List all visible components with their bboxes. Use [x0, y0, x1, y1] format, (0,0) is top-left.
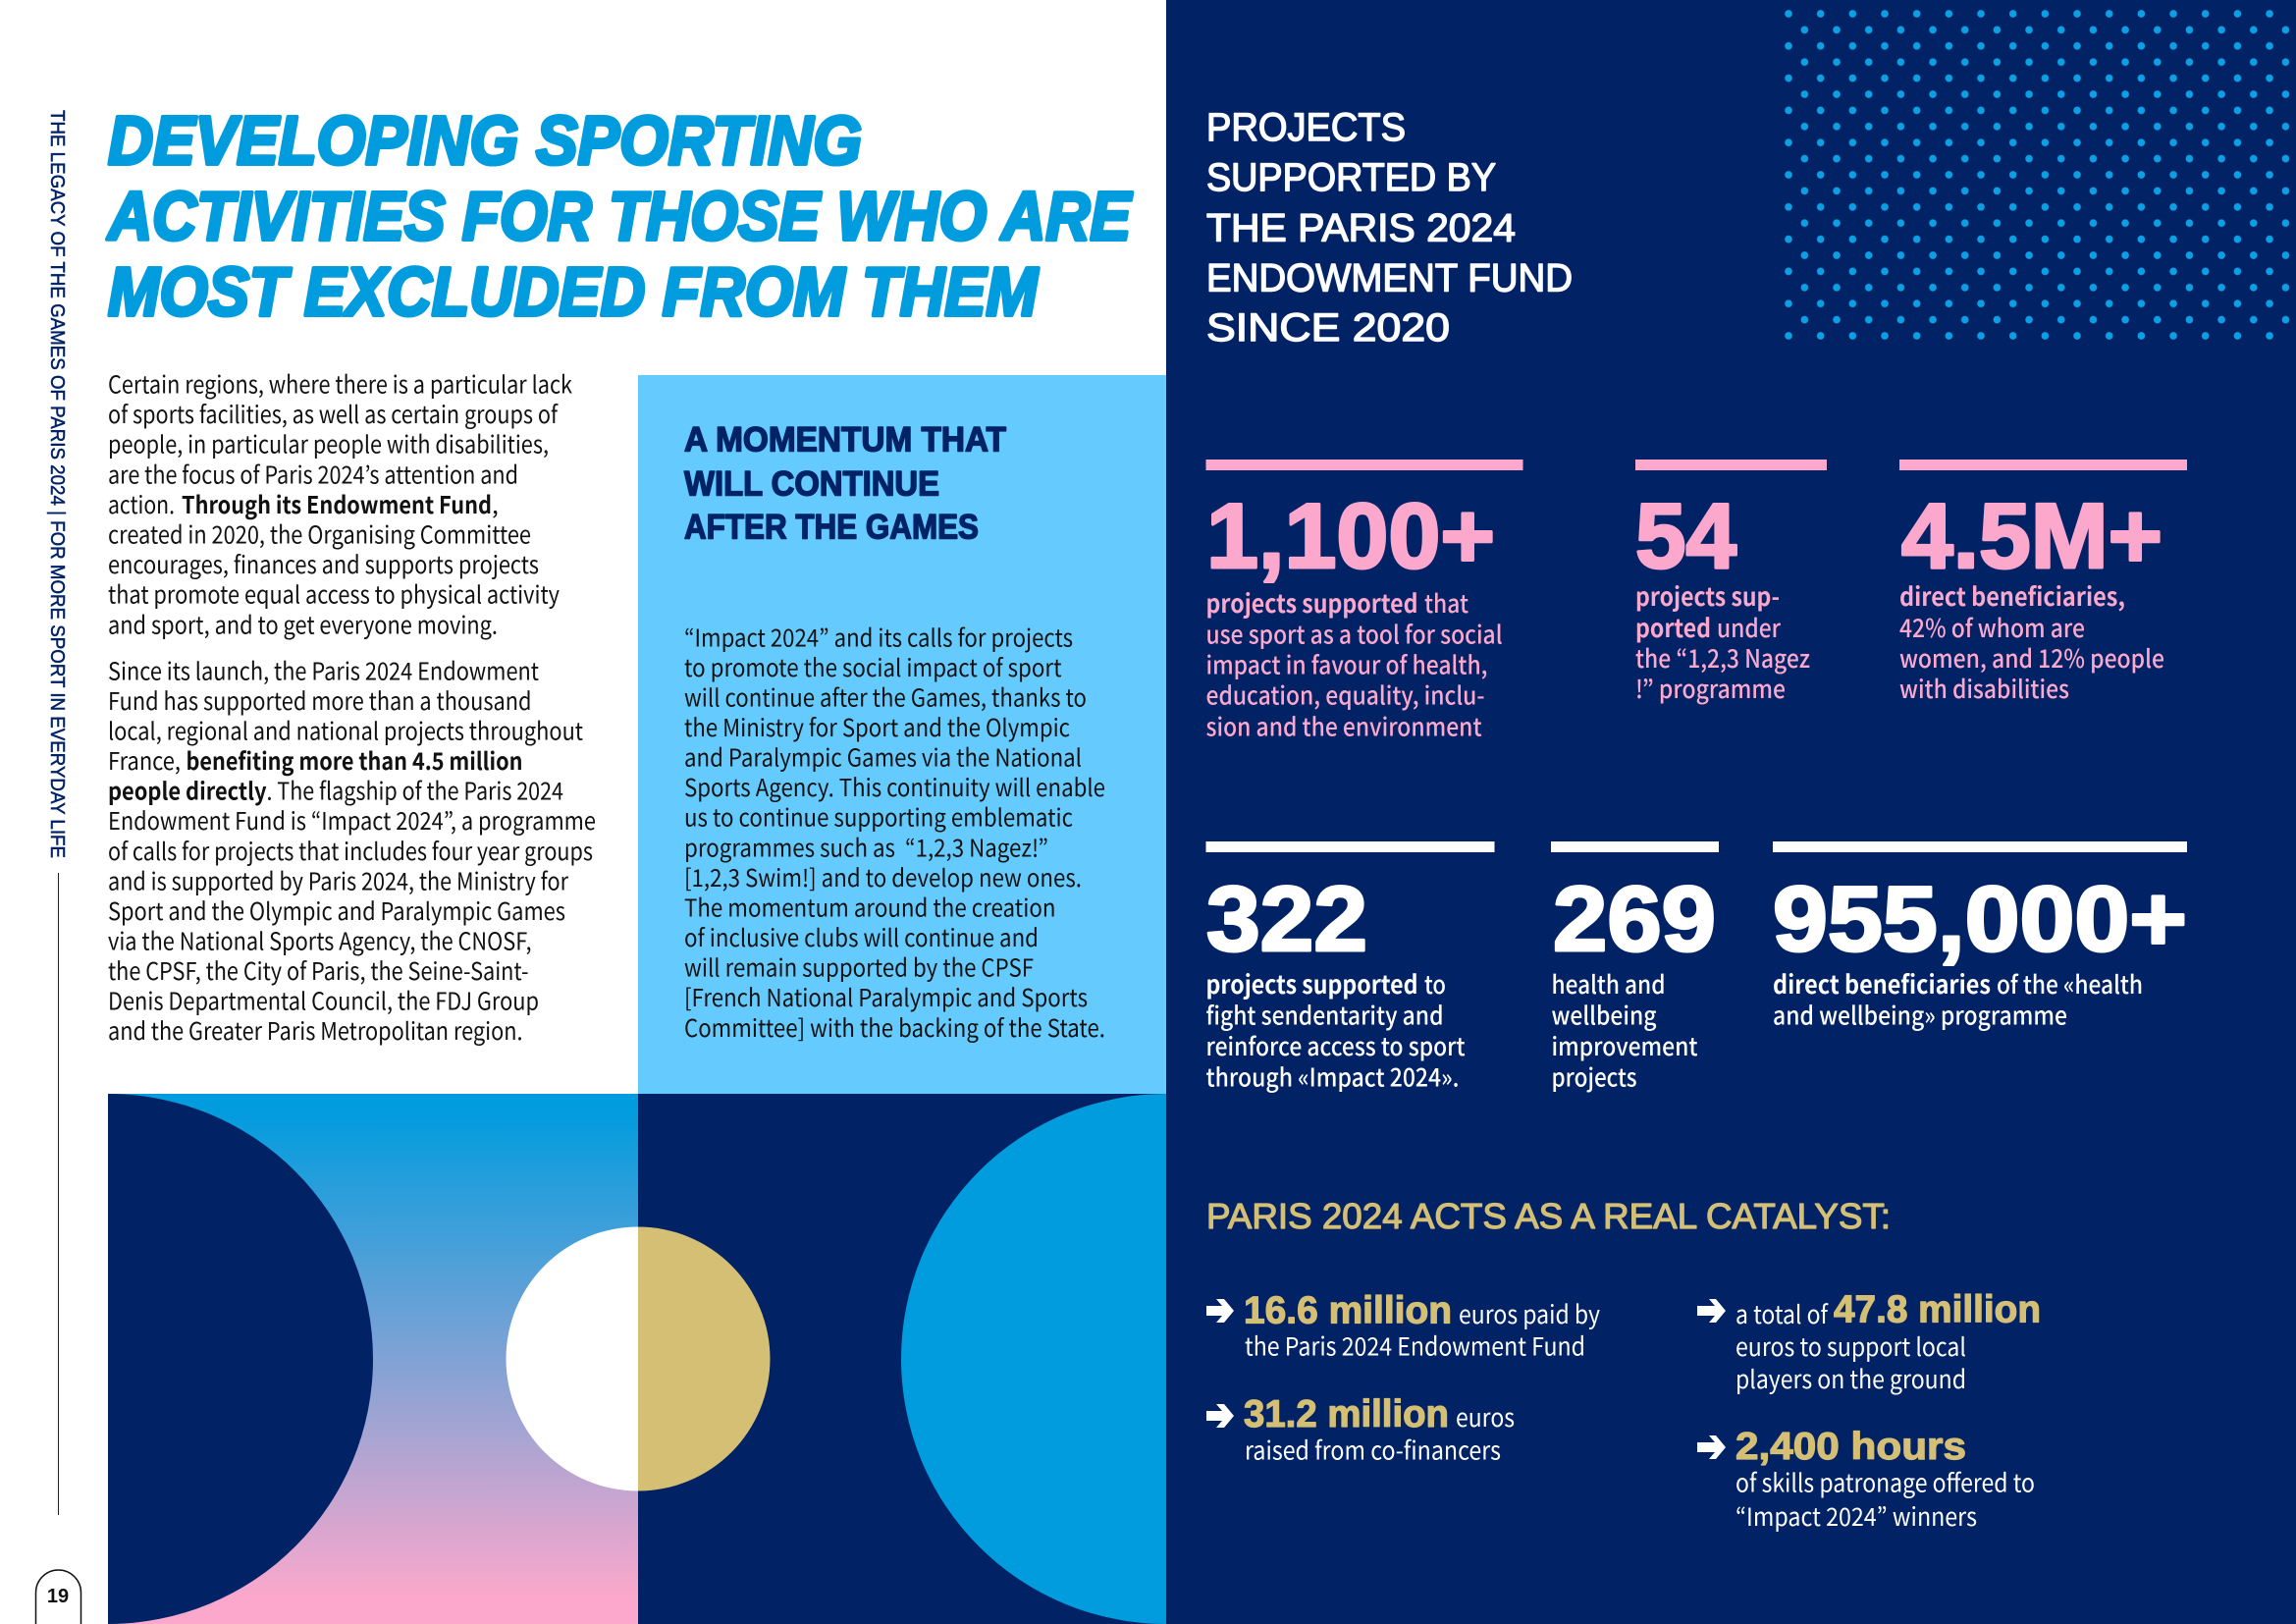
- stat: 269 projects: improvement: [1551, 1027, 1698, 1063]
- text block: momentum body: of inclusive clubs will continue and: [684, 920, 1039, 954]
- item: 2,400 hours: “Impact 2024” winners: [1735, 1497, 1977, 1534]
- item: 16.6 million: the Paris 2024 Endowment Fund: [1245, 1327, 1585, 1363]
- item: 2,400 hours: 2,400 hours: [1735, 1426, 1966, 1468]
- text block: intro paragraph one: created in 2020, the Organising Committee: [108, 516, 531, 552]
- heading: projects supported: PROJECTS: [1206, 106, 1406, 149]
- text block: momentum body: Sports Agency. This continuity will enable: [684, 770, 1105, 804]
- text block: intro paragraph two: local, regional and national projects throughout: [108, 713, 583, 748]
- text block: intro paragraph two: benefiting more than 4.5 million: [187, 743, 522, 778]
- stat: 322 projects: through «Impact 2024».: [1205, 1058, 1459, 1094]
- text block: intro paragraph two: . The flagship of the Paris 2024: [267, 774, 563, 808]
- text block: intro paragraph one: [108, 367, 572, 641]
- text block: intro paragraph two: people directly: [108, 774, 267, 808]
- stat: 54 projects: 54: [1635, 484, 1736, 587]
- graphic: geometric shapes panel: [108, 1094, 1166, 1624]
- text block: intro paragraph two: Denis Departmental Council, the FDJ Group: [108, 984, 539, 1018]
- stat: 54 projects: under: [1717, 609, 1782, 645]
- stat: 54 projects: the “1,2,3 Nagez: [1635, 639, 1810, 676]
- item: 31.2 million: raised from co-financers: [1245, 1432, 1501, 1467]
- stat: 4.5M+ beneficiaries: direct beneficiaries,: [1899, 577, 2125, 614]
- item: 31.2 million: 31.2 million: [1244, 1393, 1449, 1435]
- text block: intro paragraph two: the CPSF, the City of Paris, the Seine-Saint-: [108, 953, 528, 988]
- stat: 4.5M+ beneficiaries: women, and 12% people: [1899, 639, 2164, 676]
- heading: a momentum: WILL CONTINUE: [684, 465, 939, 503]
- text block: momentum body: will continue after the Games, thanks to: [684, 679, 1087, 714]
- stat: 54 projects: [1635, 460, 1827, 706]
- heading: projects supported: SINCE 2020: [1206, 306, 1450, 350]
- stat: 54 projects: !” programme: [1635, 670, 1786, 706]
- text block: intro paragraph two: of calls for projects that includes four year groups: [108, 834, 593, 868]
- stat: 322 projects: reinforce access to sport: [1205, 1027, 1465, 1063]
- stat: 1,100+ projects: impact in favour of health,: [1205, 646, 1488, 681]
- stat: 322 projects: fight sendentarity and: [1205, 996, 1443, 1033]
- item: 47.8 million: a total of: [1735, 1295, 1830, 1331]
- stat: 269 projects: wellbeing: [1551, 996, 1657, 1033]
- icon: arrow: [1697, 1435, 1726, 1459]
- stat: 54 projects: projects sup-: [1635, 577, 1780, 614]
- title: MOST EXCLUDED FROM THEM: [108, 253, 1040, 330]
- heading: projects supported: ENDOWMENT FUND: [1206, 257, 1573, 300]
- text block: intro paragraph one: Through its Endowment Fund: [182, 487, 492, 521]
- text block: momentum body: and Paralympic Games via the National: [684, 740, 1082, 775]
- stat: 4.5M+ beneficiaries: with disabilities: [1899, 670, 2069, 706]
- item: 16.6 million: euros paid by: [1459, 1295, 1600, 1331]
- stat: 955,000+ beneficiaries: 955,000+: [1773, 867, 2187, 970]
- icon: arrow: [1206, 1404, 1234, 1428]
- text block: intro paragraph two: Since its launch, the Paris 2024 Endowment: [108, 653, 539, 687]
- stat: 322 projects: to: [1424, 965, 1446, 1001]
- stat: 322 projects: 322: [1206, 867, 1367, 970]
- text block: intro paragraph two: Fund has supported more than a thousand: [108, 683, 532, 718]
- dot pattern: [1784, 9, 2296, 340]
- stat: 4.5M+ beneficiaries: [1899, 460, 2187, 706]
- text block: intro paragraph two: Endowment Fund is “Impact 2024”, a programme: [108, 803, 596, 838]
- stat: 54 projects: ported: [1635, 609, 1711, 645]
- text block: momentum body: [1,2,3 Swim!] and to develop new ones.: [684, 860, 1082, 894]
- item: 47.8 million: euros to support local: [1735, 1327, 1966, 1364]
- item: 47.8 million: players on the ground: [1735, 1360, 1966, 1396]
- text block: intro paragraph two: and the Greater Paris Metropolitan region.: [108, 1013, 522, 1048]
- page number tab: [35, 1570, 80, 1624]
- title: ACTIVITIES FOR THOSE WHO ARE: [106, 178, 1133, 254]
- item: 47.8 million: [1697, 1288, 2041, 1396]
- item: 16.6 million: [1206, 1290, 1600, 1363]
- heading: projects supported: [1206, 106, 1573, 350]
- text block: momentum body: [French National Paralympic and Sports: [684, 980, 1088, 1014]
- stat: 1,100+ projects: [1205, 460, 1523, 744]
- stat: 955,000+ beneficiaries: of the «health: [1997, 965, 2143, 1001]
- heading: a momentum: A MOMENTUM THAT: [684, 420, 1006, 460]
- item: 31.2 million: euros: [1456, 1398, 1515, 1435]
- text block: momentum body: programmes such as “1,2,3 Nagez!”: [684, 830, 1048, 864]
- text block: intro paragraph one: action.: [108, 487, 175, 521]
- title: [106, 102, 1133, 330]
- text block: intro paragraph two: Sport and the Olympic and Paralympic Games: [108, 893, 565, 928]
- stat: 955,000+ beneficiaries: and wellbeing» programme: [1773, 996, 2067, 1033]
- vertical rule: [58, 873, 59, 1515]
- text block: intro paragraph one: and sport, and to get everyone moving.: [108, 607, 498, 641]
- item: 2,400 hours: of skills patronage offered to: [1735, 1463, 2035, 1500]
- text block: intro paragraph one: Certain regions, where there is a particular lack: [108, 367, 572, 401]
- text block: momentum body: to promote the social impact of sport: [684, 650, 1062, 684]
- item: 31.2 million: [1206, 1393, 1515, 1467]
- text block: intro paragraph one: that promote equal access to physical activity: [108, 577, 560, 612]
- item: 47.8 million: 47.8 million: [1834, 1288, 2041, 1331]
- panel: a momentum that will continue: [638, 375, 1166, 1094]
- stat: 269 projects: projects: [1551, 1058, 1637, 1094]
- text block: momentum body: The momentum around the creation: [684, 890, 1056, 925]
- text block: intro paragraph one: of sports facilities, as well as certain groups of: [108, 397, 559, 431]
- stat: 322 projects: projects supported: [1205, 965, 1417, 1001]
- stat: 1,100+ projects: use sport as a tool for social: [1205, 615, 1502, 652]
- stat: 1,100+ projects: sion and the environment: [1205, 707, 1482, 744]
- stat: 322 projects: [1205, 841, 1494, 1094]
- title: DEVELOPING SPORTING: [108, 102, 862, 179]
- stat: 1,100+ projects: that: [1424, 584, 1468, 621]
- heading: a momentum: AFTER THE GAMES: [684, 509, 979, 546]
- text block: momentum body: “Impact 2024” and its calls for projects: [684, 620, 1073, 654]
- panel: right navy background: [1166, 0, 2296, 1624]
- stat: 1,100+ projects: education, equality, inclu-: [1205, 676, 1484, 713]
- text block: momentum body: the Ministry for Sport and the Olympic: [684, 710, 1070, 744]
- item: 2,400 hours: [1697, 1426, 2035, 1534]
- stat: 269 projects: health and: [1551, 965, 1665, 1001]
- stat: 1,100+ projects: projects supported: [1205, 584, 1417, 621]
- text block: intro paragraph two: France,: [108, 743, 181, 778]
- stat: 955,000+ beneficiaries: direct beneficiaries: [1773, 965, 1991, 1001]
- stat: 4.5M+ beneficiaries: 42% of whom are: [1899, 609, 2085, 645]
- stat: 4.5M+ beneficiaries: 4.5M+: [1901, 484, 2163, 587]
- text block: intro paragraph two: and is supported by Paris 2024, the Ministry for: [108, 863, 568, 897]
- text block: momentum body: us to continue supporting emblematic: [684, 800, 1073, 835]
- page number tab: 19: [47, 1586, 69, 1607]
- stat: 955,000+ beneficiaries: [1773, 841, 2187, 1033]
- item: 16.6 million: 16.6 million: [1244, 1290, 1452, 1331]
- text block: intro paragraph one: encourages, finances and supports projects: [108, 547, 539, 581]
- text block: momentum body: Committee] with the backing of the State.: [684, 1010, 1105, 1045]
- text block: intro paragraph two: via the National Sports Agency, the CNOSF,: [108, 923, 532, 958]
- heading: a momentum: [684, 420, 1006, 546]
- stat: 269 projects: 269: [1553, 867, 1716, 970]
- heading: projects supported: THE PARIS 2024: [1206, 206, 1516, 249]
- text block: intro paragraph one: people, in particular people with disabilities,: [108, 427, 549, 461]
- icon: arrow: [1206, 1299, 1234, 1323]
- vertical running header: THE LEGACY OF THE GAMES OF PARIS 2024 | FOR MORE SPORT IN EVERYDAY LIFE: [46, 110, 68, 858]
- heading: catalyst: PARIS 2024 ACTS AS A REAL CATALYST:: [1206, 1196, 1891, 1236]
- text block: intro paragraph one: are the focus of Paris 2024’s attention and: [108, 457, 518, 491]
- text block: momentum body: will remain supported by the CPSF: [684, 950, 1034, 985]
- text block: intro paragraph two: [108, 653, 596, 1048]
- text block: momentum body: [684, 620, 1105, 1045]
- text block: intro paragraph one: ,: [492, 487, 499, 521]
- icon: arrow: [1697, 1299, 1726, 1323]
- stat: 269 projects: [1551, 841, 1719, 1094]
- stat: 1,100+ projects: 1,100+: [1206, 484, 1495, 587]
- heading: projects supported: SUPPORTED BY: [1206, 156, 1496, 199]
